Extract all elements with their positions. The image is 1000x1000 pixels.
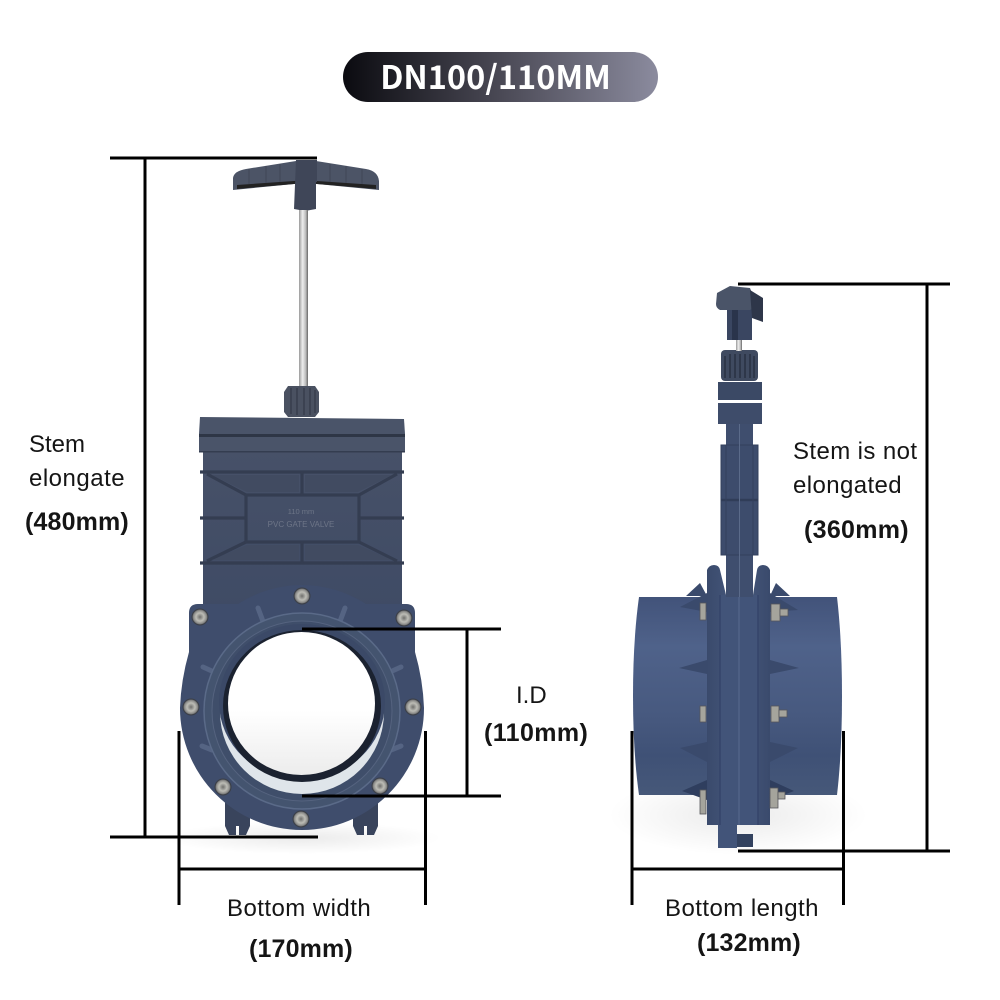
label: bottom width: (170mm)	[249, 935, 353, 963]
label: stem elongate	[25, 431, 129, 536]
flange plate	[180, 585, 424, 830]
gussets	[679, 583, 799, 800]
bolts side	[700, 603, 788, 814]
label: bottom length	[665, 895, 819, 957]
label: stem not elongated: (360mm)	[804, 516, 909, 544]
label: inner diameter	[484, 682, 588, 747]
label: bottom width	[227, 895, 371, 963]
label: inner diameter: I.D	[516, 682, 547, 709]
bonnet and body	[199, 417, 405, 610]
hook	[737, 834, 753, 847]
label: inner diameter: (110mm)	[484, 719, 588, 747]
label: stem not elongated: elongated	[793, 472, 902, 499]
union ring	[204, 613, 400, 809]
right valve: side view	[633, 286, 842, 848]
label: stem elongate: Stem	[29, 431, 85, 458]
side nut	[721, 350, 758, 381]
left valve: front view, elongated stem	[180, 160, 424, 835]
bonnet and body: 110 mm	[288, 507, 314, 516]
floor shadows	[162, 775, 868, 855]
stem pin	[736, 338, 742, 351]
label: bottom length: Bottom length	[665, 895, 819, 922]
flange plates	[707, 565, 770, 825]
flange ribs	[202, 608, 401, 750]
label: bottom length: (132mm)	[697, 929, 801, 957]
bore	[219, 624, 385, 794]
pipe	[633, 597, 842, 795]
label: stem not elongated: Stem is not	[793, 438, 917, 465]
title pill: DN100/110MM	[380, 52, 611, 99]
dimension lines	[110, 158, 950, 905]
label: stem elongate: (480mm)	[25, 508, 129, 536]
bonnet and body: PVC GATE VALVE	[268, 520, 334, 529]
label: stem not elongated	[793, 438, 917, 544]
side knob	[716, 286, 763, 340]
feet	[225, 800, 378, 835]
bolts	[183, 588, 421, 827]
label: bottom width: Bottom width	[227, 895, 371, 922]
T handle	[233, 160, 379, 211]
stem column	[718, 382, 762, 597]
gland nut	[284, 386, 319, 417]
stem rod	[299, 210, 308, 386]
label: stem elongate: elongate	[29, 465, 125, 492]
title pill	[343, 52, 658, 102]
